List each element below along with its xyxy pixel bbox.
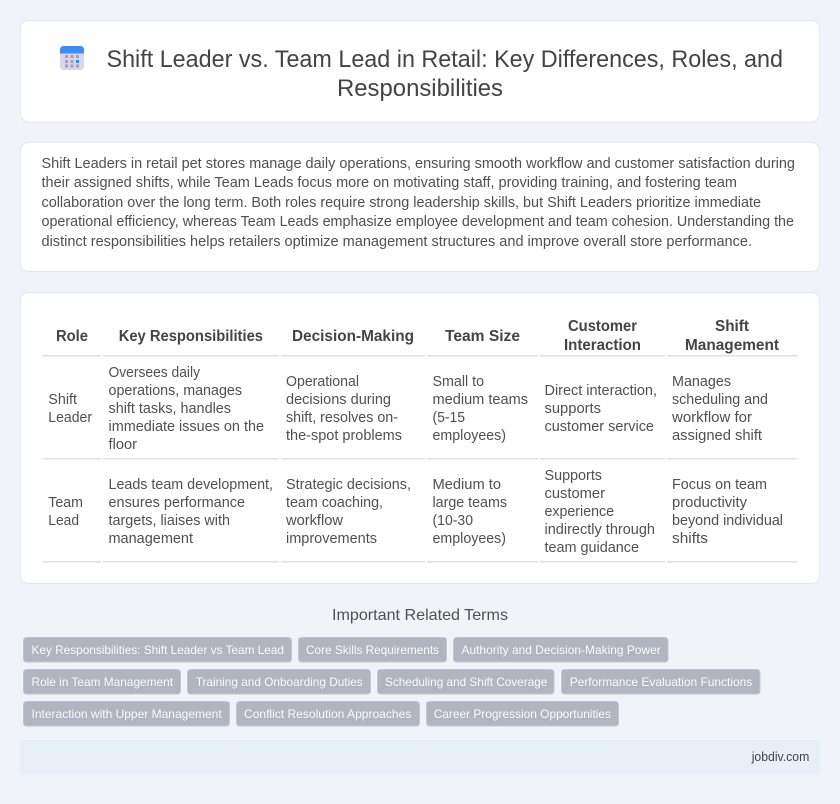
text block: introduction paragraph: Shift Leaders in retail pet stores manage daily operations, ensuring smooth workflow and customer satisfaction during [42,156,795,172]
heading: important related terms: Important Related Terms [332,607,508,624]
table row: Team Lead: large teams [432,495,507,511]
title: Responsibilities [337,75,503,102]
table row: Shift Leader: Manages [672,374,731,390]
table header row: Customer [568,318,637,335]
table header row [56,318,780,354]
table row: Shift Leader: decisions during [286,392,391,408]
table row: Team Lead: improvements [286,531,377,547]
table row: Team Lead: indirectly through [544,522,655,538]
table row: Shift Leader: Direct interaction, [544,383,657,399]
table row: Shift Leader: employees) [432,428,506,444]
table row: Team Lead: experience [544,504,614,520]
tag [24,702,230,726]
tag [24,670,180,694]
footer source label: jobdiv.com [751,749,809,764]
tag [188,670,370,694]
table row: Team Lead [48,468,783,556]
tag: Scheduling and Shift Coverage [385,675,548,689]
text block: introduction paragraph: distinct responsibilities helps retailers optimize management structures and improve overall store performance. [42,234,752,250]
table row: Shift Leader: Operational [286,374,359,390]
tag: Role in Team Management [32,675,174,689]
table header row: Interaction [564,337,641,354]
table row: Shift Leader: supports [544,401,601,417]
table row: Team Lead: management [108,531,193,547]
table row: Shift Leader: the-spot problems [286,428,402,444]
tag [562,670,760,694]
table row: Team Lead: (10-30 [432,513,473,529]
table header row: Role [56,328,88,345]
table row: Shift Leader: workflow for [671,410,752,426]
table row: Team Lead: targets, liaises with [108,513,230,529]
table row: Team Lead: employees) [432,531,506,547]
table row: Team Lead: workflow [285,513,344,529]
table row: Team Lead: Team [48,495,83,511]
tag: Training and Onboarding Duties [196,675,363,689]
table header row: Shift [715,318,750,335]
text block: introduction paragraph [42,156,795,250]
table row: Team Lead: customer [544,486,605,502]
table row: Team Lead: Lead [48,513,79,529]
tag list: related terms [24,638,760,726]
text block: introduction paragraph: their assigned shifts, while Team Leads focus more on motivating staff, providing training, and fostering team [42,175,737,191]
table row: Shift Leader: operations, manages [108,383,242,399]
table row: Shift Leader: assigned shift [672,428,762,444]
tag: Career Progression Opportunities [434,707,611,721]
tag: Conflict Resolution Approaches [244,707,411,721]
table row: Shift Leader: floor [108,437,137,453]
table row: Shift Leader: Small to [432,374,484,390]
tag: Key Responsibilities: Shift Leader vs Team Lead [32,643,284,657]
table row: Team Lead: Supports [544,468,602,484]
table row: Team Lead: Medium to [432,477,501,493]
panel: title card [20,20,820,122]
table row: Shift Leader: Leader [48,410,92,426]
table row: Team Lead: team guidance [544,540,639,556]
tag [236,702,420,726]
text block: introduction paragraph: collaboration over the long term. Both roles require strong leadership skills, but Shift Leaders prioritize immediate [42,195,761,211]
footer [20,740,820,774]
tag [298,638,446,662]
tag [378,670,554,694]
tag: Interaction with Upper Management [32,707,222,721]
table row: Shift Leader: customer service [544,419,654,435]
tag [454,638,668,662]
text block: introduction paragraph: operational efficiency, whereas Team Leads emphasize employee development and team cohesion. Understanding the [42,214,794,230]
table row: Shift Leader: Shift [48,392,77,408]
tag: Core Skills Requirements [306,643,439,657]
table row: Team Lead: shifts [672,531,708,547]
table row: Shift Leader: (5-15 [432,410,465,426]
title [106,46,783,102]
table row: Team Lead: Leads team development, [108,477,273,493]
tag [24,638,292,662]
table header row: Key Responsibilities [119,328,263,345]
table row: Shift Leader: shift, resolves on- [286,410,398,426]
table header row: Decision-Making [292,328,414,345]
tag: Performance Evaluation Functions [570,675,752,689]
panel: comparison table [20,292,820,584]
table row: Shift Leader: immediate issues on the [108,419,264,435]
table row: Shift Leader: scheduling and [672,392,768,408]
table row: Shift Leader [48,365,768,453]
panel: introduction [20,142,820,272]
table header row: Team Size [445,328,520,345]
tag: Authority and Decision-Making Power [462,643,661,657]
title: Shift Leader vs. Team Lead in Retail: Key Differences, Roles, and [106,46,783,73]
table row: Shift Leader: shift tasks, handles [108,401,231,417]
icon: calendar [60,46,84,70]
table row: Team Lead: ensures performance [108,495,245,511]
tag [426,702,618,726]
table row: Shift Leader: Oversees daily [108,365,201,381]
table row: Team Lead: Focus on team [672,477,767,493]
table row: Team Lead: Strategic decisions, [286,477,411,493]
table header row: Management [685,337,780,354]
table row: Team Lead: team coaching, [286,495,383,511]
table row: Shift Leader: medium teams [432,392,528,408]
table row: Team Lead: productivity [672,495,748,511]
table row: Team Lead: beyond individual [672,513,783,529]
